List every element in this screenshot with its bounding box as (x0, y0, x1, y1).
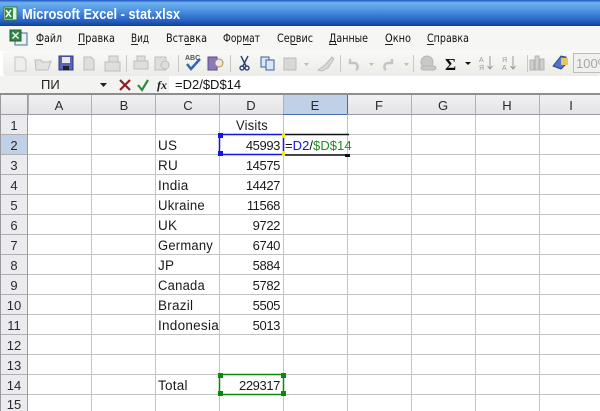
formula bar (0, 76, 600, 93)
column C: countries: Ukraine (158, 198, 205, 213)
column C: countries: India (158, 178, 189, 193)
icon: hyperlink (421, 56, 436, 70)
total reference highlight D14 (218, 373, 286, 396)
active cell E2: =D2/$D$14 (285, 138, 352, 153)
menu items (36, 31, 469, 45)
column C: countries: Germany (158, 238, 213, 253)
column headers: I (569, 98, 573, 113)
icon: open (35, 60, 51, 70)
column headers (0, 95, 600, 115)
menu items: Вставка (166, 31, 207, 45)
icon: workbook (10, 30, 27, 45)
column headers: H (502, 98, 512, 113)
title bar (0, 0, 600, 26)
window title: Microsoft Excel - stat.xlsx (22, 7, 180, 23)
column D: visits: 6740 (253, 238, 280, 253)
icons: permissions, mail, print, preview (84, 56, 169, 71)
icon: sigma: Σ (445, 55, 456, 74)
menu items: Вид (131, 31, 149, 45)
icons: paste, format painter (284, 57, 334, 71)
row headers: 13 (7, 358, 21, 373)
menu items: Файл (36, 31, 62, 45)
small dropdown arrows (304, 63, 409, 66)
column D: visits: 5782 (253, 278, 280, 293)
column C: countries: JP (158, 258, 174, 273)
column C: countries: US (158, 138, 177, 153)
icon: name box dropdown (100, 83, 107, 87)
column D: visits: 11568 (247, 198, 280, 213)
formula text: =D2/$D$14 (175, 77, 241, 92)
column D: visits: Visits (236, 118, 268, 133)
row headers: 11 (7, 318, 21, 333)
row headers: 4 (10, 178, 18, 193)
column D: visits: 229317 (239, 378, 280, 393)
column D: visits: 5884 (253, 258, 280, 273)
column C: countries (158, 138, 219, 393)
column D: visits: 45993 (246, 138, 280, 153)
column D: visits: 9722 (253, 218, 280, 233)
row headers: 3 (10, 158, 18, 173)
spreadsheet grid (0, 93, 600, 411)
column D: visits (236, 118, 280, 393)
icon: research (208, 57, 223, 70)
icon: drawing (553, 56, 568, 69)
icons: sort: Я (479, 65, 484, 72)
row headers: 1 (10, 118, 18, 133)
column headers: D (246, 98, 256, 113)
icon: save (59, 56, 73, 70)
icon: cut (240, 56, 249, 70)
column C: countries: Canada (158, 278, 205, 293)
active cell E2 (285, 134, 352, 157)
icon: enter (138, 80, 148, 90)
column headers: B (120, 98, 128, 113)
row headers: 14 (7, 378, 21, 393)
column headers: G (438, 98, 448, 113)
column D: visits: 14427 (246, 178, 280, 193)
row headers: 9 (10, 278, 18, 293)
toolbar (3, 51, 600, 76)
menu items: Окно (385, 31, 411, 45)
column C: countries: Total (158, 378, 188, 393)
formula reference highlight D2 (218, 133, 285, 156)
icons: sort: Я (502, 57, 507, 64)
column headers: C (183, 98, 193, 113)
icon: copy (261, 57, 274, 70)
icon: spellcheck: ABC (185, 55, 200, 62)
menu items: Формат (223, 31, 260, 45)
icon: excel app (4, 7, 17, 20)
column D: visits: 14575 (246, 158, 280, 173)
row headers: 5 (10, 198, 18, 213)
column D: visits: 5505 (253, 298, 280, 313)
column D: visits: 5013 (253, 318, 280, 333)
row headers: 10 (7, 298, 21, 313)
icons: sort: А (479, 57, 484, 64)
column C: countries: Brazil (158, 298, 193, 313)
icon: chart (530, 56, 544, 70)
icon: autosum dropdown (465, 62, 471, 65)
column C: countries: Indonesia (158, 318, 219, 333)
menu items: Сервис (277, 31, 313, 45)
row headers: 6 (10, 218, 18, 233)
icon: spellcheck (185, 55, 200, 69)
menu items: Справка (427, 31, 469, 45)
icons: sort (479, 56, 516, 72)
menu items: Правка (78, 31, 115, 45)
icon: cancel (120, 80, 130, 90)
column C: countries: RU (158, 158, 178, 173)
icons: undo, redo (350, 59, 392, 70)
menu items: Данные (329, 31, 368, 45)
icon: function: fx (157, 78, 167, 92)
column C: countries: UK (158, 218, 177, 233)
column headers: E (311, 98, 320, 113)
row headers: 8 (10, 258, 18, 273)
name box: ПИ (41, 77, 60, 92)
row headers: 7 (10, 238, 18, 253)
row headers (0, 95, 28, 411)
column headers: F (375, 98, 383, 113)
row headers: 12 (7, 338, 21, 353)
toolbar separators (126, 55, 528, 72)
menu bar (0, 26, 600, 51)
row headers: 2 (10, 138, 18, 153)
column headers: A (55, 98, 64, 113)
icon: new (15, 57, 26, 71)
icons: sort: А (502, 65, 507, 72)
